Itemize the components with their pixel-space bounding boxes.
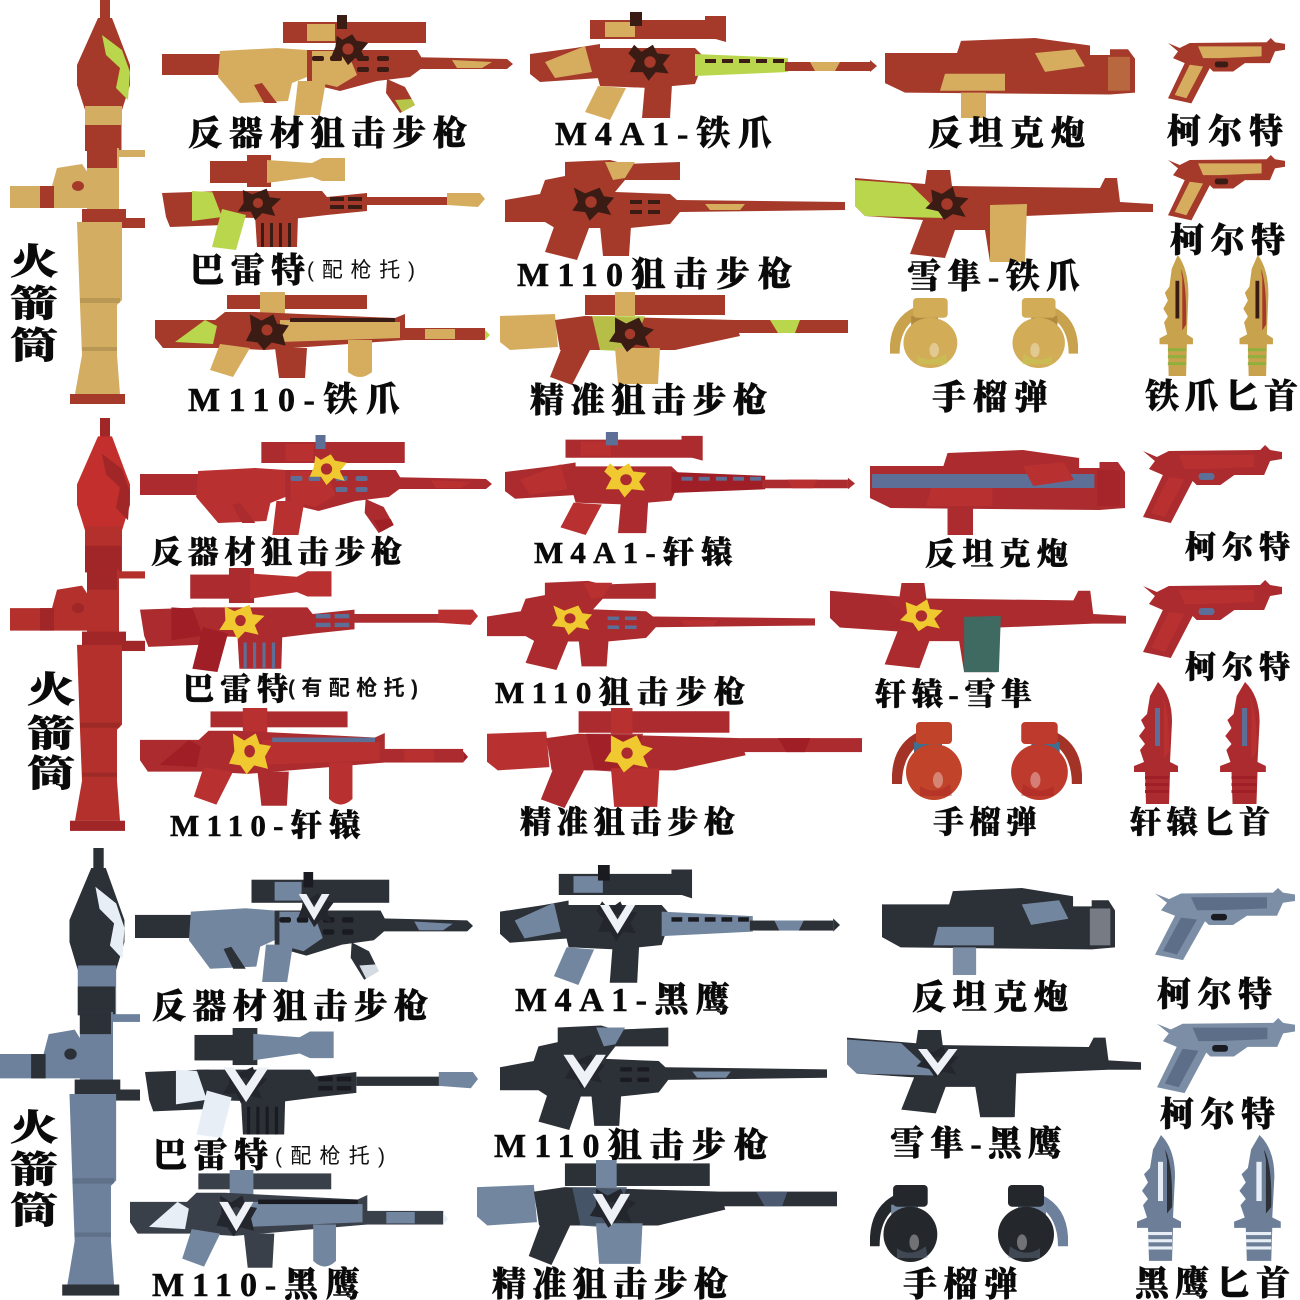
item: colt pistol bbox=[1157, 1018, 1295, 1134]
panel: iron claw camouflage set bbox=[10, 0, 1298, 420]
item: M4A1 iron claw bbox=[530, 12, 877, 153]
item: barrett: 巴雷特 bbox=[190, 252, 305, 290]
item: barrett bbox=[145, 1028, 478, 1175]
heading: rocket launcher bbox=[10, 242, 58, 367]
item: colt pistol: 柯尔特 bbox=[1157, 976, 1272, 1014]
item: anti-tank launcher: 反坦克炮 bbox=[925, 537, 1068, 572]
item: snow falcon black hawk bbox=[847, 1030, 1141, 1163]
item: M110 sniper rifle bbox=[487, 581, 815, 710]
item: precision sniper rifle bbox=[500, 292, 848, 420]
item: M110 iron claw: M110-铁爪 bbox=[188, 381, 400, 419]
item: M4A1 black hawk bbox=[500, 865, 840, 1019]
item: grenades bbox=[890, 298, 1078, 417]
item: M110 sniper rifle bbox=[505, 160, 845, 294]
item: barrett: 巴雷特 bbox=[183, 672, 288, 707]
panel: black hawk set bbox=[0, 848, 1295, 1300]
item: anti-materiel rifle bbox=[135, 872, 473, 1026]
icon: rocket launcher, xuanyuan bbox=[10, 418, 148, 831]
item: anti-materiel rifle: 反器材狙击步枪 bbox=[151, 535, 402, 570]
item: precision sniper rifle bbox=[477, 1160, 837, 1300]
item: xuanyuan daggers: 轩辕匕首 bbox=[1130, 805, 1270, 840]
item: xuanyuan snow falcon bbox=[830, 583, 1126, 712]
item: M4A1 black hawk: M4A1-黑鹰 bbox=[515, 980, 730, 1019]
item: colt pistol bbox=[1168, 155, 1285, 260]
item: grenades bbox=[892, 722, 1082, 840]
item: grenades: 手榴弹 bbox=[932, 379, 1048, 417]
item: anti-tank launcher: 反坦克炮 bbox=[928, 115, 1085, 153]
heading: rocket launcher: 箭 bbox=[10, 284, 58, 325]
item: barrett bbox=[162, 155, 485, 290]
item: anti-tank launcher bbox=[882, 888, 1115, 1017]
item: xuanyuan snow falcon: 轩辕-雪隼 bbox=[875, 677, 1032, 712]
item: colt pistol: 柯尔特 bbox=[1167, 113, 1283, 151]
item: iron claw daggers: 铁爪匕首 bbox=[1145, 378, 1298, 416]
icon: rocket launcher, black hawk bbox=[0, 848, 143, 1296]
heading: rocket launcher: 火 bbox=[10, 1108, 58, 1149]
item: M4A1 xuanyuan bbox=[505, 432, 855, 570]
item: colt pistol: 柯尔特 bbox=[1185, 650, 1290, 685]
item: anti-tank launcher: 反坦克炮 bbox=[912, 979, 1068, 1017]
item: colt pistol bbox=[1143, 445, 1290, 565]
icon: rocket launcher, iron claw bbox=[10, 0, 148, 404]
item: anti-materiel rifle: 反器材狙击步枪 bbox=[152, 988, 428, 1026]
item: colt pistol: 柯尔特 bbox=[1185, 530, 1290, 565]
item: M110 sniper rifle bbox=[494, 1025, 827, 1165]
item: barrett bbox=[140, 568, 478, 707]
heading: rocket launcher: 筒 bbox=[10, 326, 58, 367]
heading: rocket launcher: 火 bbox=[27, 670, 75, 711]
item: colt pistol bbox=[1167, 38, 1285, 151]
item: barrett: (配枪托) bbox=[275, 1145, 385, 1168]
item: precision sniper rifle bbox=[487, 708, 862, 840]
heading: rocket launcher: 筒 bbox=[27, 754, 75, 795]
item: precision sniper rifle: 精准狙击步枪 bbox=[520, 805, 735, 840]
item: M110 sniper rifle: M110狙击步枪 bbox=[494, 1127, 768, 1165]
item: M110 iron claw bbox=[155, 292, 490, 419]
item: barrett: 巴雷特 bbox=[153, 1137, 268, 1175]
heading: rocket launcher: 筒 bbox=[10, 1191, 58, 1232]
item: grenades bbox=[870, 1185, 1068, 1300]
item: anti-materiel rifle: 反器材狙击步枪 bbox=[188, 115, 467, 153]
item: anti-materiel rifle bbox=[162, 15, 513, 153]
item: colt pistol: 柯尔特 bbox=[1170, 222, 1285, 260]
item: M110 black hawk bbox=[130, 1170, 448, 1300]
item: black hawk daggers bbox=[1135, 1135, 1290, 1300]
item: anti-tank launcher bbox=[885, 38, 1135, 153]
heading: rocket launcher bbox=[10, 1108, 58, 1232]
item: anti-materiel rifle bbox=[140, 435, 492, 570]
item: iron claw daggers bbox=[1145, 255, 1298, 416]
item: barrett: (配枪托) bbox=[307, 259, 415, 282]
item: snow falcon iron claw bbox=[855, 170, 1153, 296]
item: snow falcon iron claw: 雪隼-铁爪 bbox=[907, 257, 1080, 296]
item: precision sniper rifle: 精准狙击步枪 bbox=[530, 382, 767, 420]
item: colt pistol: 柯尔特 bbox=[1160, 1096, 1275, 1134]
item: M110 sniper rifle: M110狙击步枪 bbox=[495, 675, 745, 710]
item: barrett: (有配枪托) bbox=[288, 676, 418, 700]
item: M110 xuanyuan bbox=[140, 708, 468, 843]
heading: rocket launcher: 箭 bbox=[27, 714, 75, 755]
item: M110 xuanyuan: M110-轩辕 bbox=[170, 808, 361, 843]
heading: rocket launcher: 火 bbox=[10, 242, 58, 283]
item: M110 sniper rifle: M110狙击步枪 bbox=[517, 256, 792, 294]
item: M4A1 iron claw: M4A1-铁爪 bbox=[555, 115, 772, 153]
heading: rocket launcher: 箭 bbox=[10, 1150, 58, 1191]
item: anti-tank launcher bbox=[870, 450, 1125, 572]
item: colt pistol bbox=[1143, 580, 1290, 685]
item: colt pistol bbox=[1155, 888, 1295, 1014]
heading: rocket launcher bbox=[27, 670, 75, 795]
item: grenades: 手榴弹 bbox=[933, 805, 1037, 840]
item: xuanyuan daggers bbox=[1130, 682, 1270, 840]
item: M4A1 xuanyuan: M4A1-轩辕 bbox=[534, 535, 733, 570]
item: snow falcon black hawk: 雪隼-黑鹰 bbox=[890, 1124, 1062, 1163]
panel: xuanyuan red set bbox=[10, 418, 1290, 843]
